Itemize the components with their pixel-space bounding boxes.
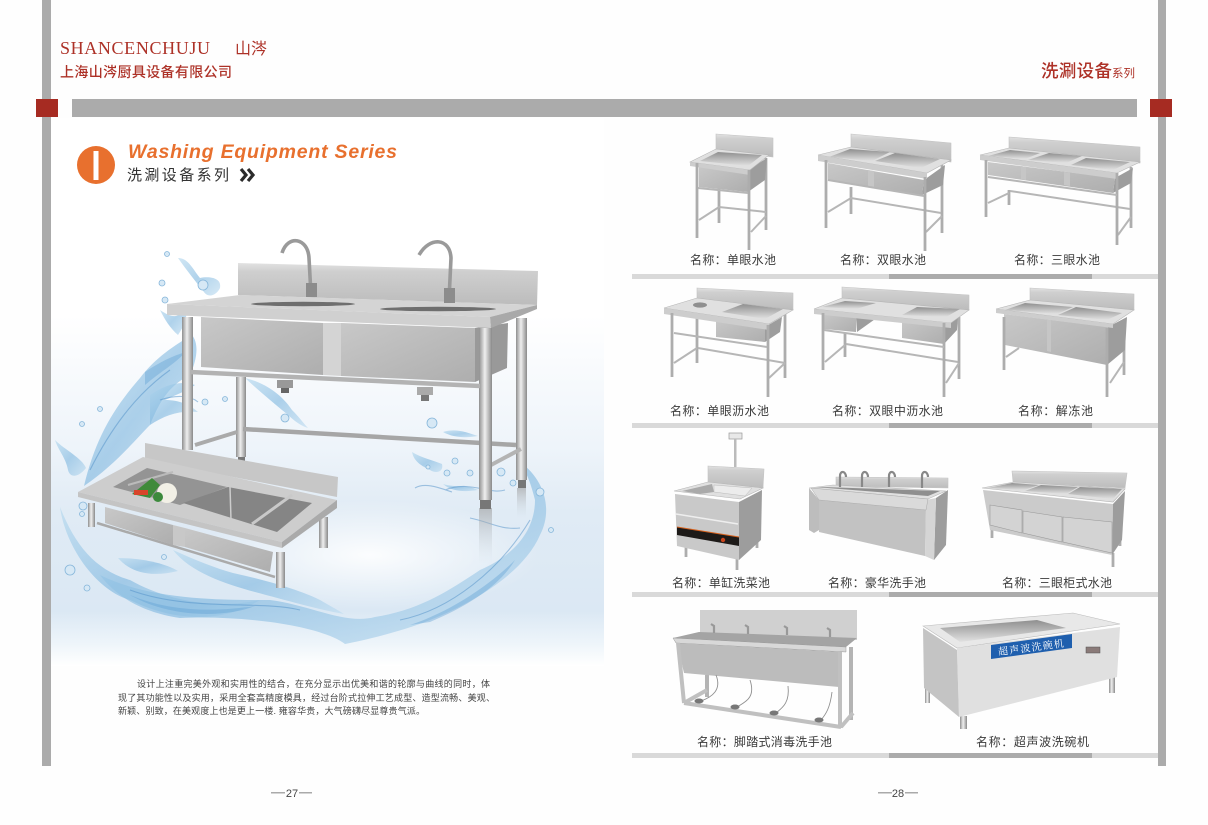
company name: 上海山涔厨具设备有限公司 bbox=[60, 64, 232, 80]
backsplash bbox=[145, 443, 338, 497]
blue name plate bbox=[991, 634, 1072, 659]
label: 名称：超声波洗碗机 bbox=[976, 734, 1089, 749]
vegetables bbox=[132, 478, 177, 503]
product: thawing sink bbox=[996, 288, 1134, 397]
product: single bowl sink bbox=[690, 134, 773, 250]
label: 名称：三眼水池 bbox=[1014, 252, 1100, 267]
front leg bbox=[276, 552, 285, 588]
page number 28: 28 bbox=[892, 788, 904, 800]
background highlight bbox=[200, 500, 540, 610]
product: luxury hand wash sink bbox=[809, 472, 948, 560]
rail and rear legs bbox=[97, 523, 275, 577]
english heading: Washing Equipment Series bbox=[128, 141, 397, 163]
worktop bbox=[78, 457, 337, 542]
page number 27 bbox=[271, 788, 312, 800]
bowl openings bbox=[251, 302, 355, 306]
page number 28 bbox=[878, 788, 918, 800]
faucets bbox=[282, 241, 451, 300]
faucets bbox=[840, 472, 928, 488]
label: 名称：脚踏式消毒洗手池 bbox=[697, 734, 832, 749]
label: 名称：解冻池 bbox=[1018, 403, 1093, 418]
description text bbox=[118, 678, 495, 716]
product: single tank vegetable sink bbox=[674, 433, 764, 570]
page number 27: 27 bbox=[286, 788, 298, 800]
section badge bbox=[77, 146, 115, 184]
left red square bbox=[36, 99, 58, 117]
icon: double chevron bbox=[241, 169, 253, 181]
product: double bowl centre drainer sink bbox=[814, 287, 969, 397]
product: triple bowl sink bbox=[980, 137, 1140, 245]
backsplash bbox=[238, 263, 538, 305]
brand name chinese: 山涔 bbox=[235, 40, 267, 58]
header grey band bbox=[72, 99, 1137, 117]
upper rail bbox=[190, 372, 480, 386]
right splash bbox=[412, 452, 442, 472]
label: 名称：双眼水池 bbox=[840, 252, 926, 267]
left page vertical bar bbox=[42, 0, 51, 766]
main product: double bowl sink bbox=[167, 241, 538, 563]
lower ring bbox=[60, 507, 260, 617]
row dividers bbox=[632, 274, 1158, 758]
hoses bbox=[701, 675, 832, 720]
right page vertical bar bbox=[1158, 0, 1166, 766]
section title top right: 系列 bbox=[1112, 66, 1135, 80]
water droplets bbox=[65, 252, 554, 591]
water splash illustration bbox=[55, 252, 554, 644]
label: 名称：三眼柜式水池 bbox=[1002, 575, 1112, 590]
product: double bowl sink bbox=[818, 134, 951, 251]
leg reflections bbox=[479, 508, 492, 563]
right red square bbox=[1150, 99, 1172, 117]
product: three bowl cabinet sink bbox=[982, 471, 1127, 567]
label: 名称：豪华洗手池 bbox=[828, 575, 926, 590]
label: 名称：单眼水池 bbox=[690, 252, 776, 267]
chinese heading: 洗涮设备系列 bbox=[127, 167, 229, 184]
front legs bbox=[182, 317, 193, 450]
blue name plate: 超声波洗碗机 bbox=[997, 637, 1065, 658]
legs bbox=[236, 377, 246, 457]
brand name latin: SHANCENCHUJU bbox=[60, 38, 210, 58]
description text: 设计上注重完美外观和实用性的结合，在充分显示出优美和谐的轮廓与曲线的同时，体 bbox=[137, 678, 490, 689]
basin side bbox=[475, 323, 508, 382]
basin fronts bbox=[201, 317, 323, 375]
product: foot operated hand wash sink bbox=[673, 610, 857, 728]
worktop bbox=[167, 295, 537, 317]
product: single bowl drainer sink bbox=[664, 288, 793, 397]
bowls bbox=[113, 468, 227, 505]
foot pedals bbox=[694, 698, 824, 722]
secondary product: sink with vegetables bbox=[78, 443, 338, 588]
label: 名称：单眼沥水池 bbox=[670, 403, 769, 418]
drains bbox=[277, 380, 293, 388]
water plume bbox=[84, 335, 196, 486]
label: 名称：双眼中沥水池 bbox=[832, 403, 943, 418]
label: 名称：单缸洗菜池 bbox=[672, 575, 770, 590]
description text: 现了其功能性以及实用，采用全套高精度模具，经过台阶式拉伸工艺成型、造型流畅、美观、 bbox=[118, 692, 495, 703]
brand header bbox=[60, 38, 267, 80]
faucets bbox=[711, 624, 830, 637]
section title top right: 洗涮设备 bbox=[1041, 61, 1112, 81]
panel: left page background bbox=[51, 118, 604, 666]
description text: 新颖、别致，在美观度上也是更上一楼. 雍容华贵，大气磅礴尽显尊贵气派。 bbox=[118, 705, 425, 716]
basin fronts bbox=[105, 507, 173, 545]
product: ultrasonic dishwasher bbox=[923, 613, 1120, 729]
